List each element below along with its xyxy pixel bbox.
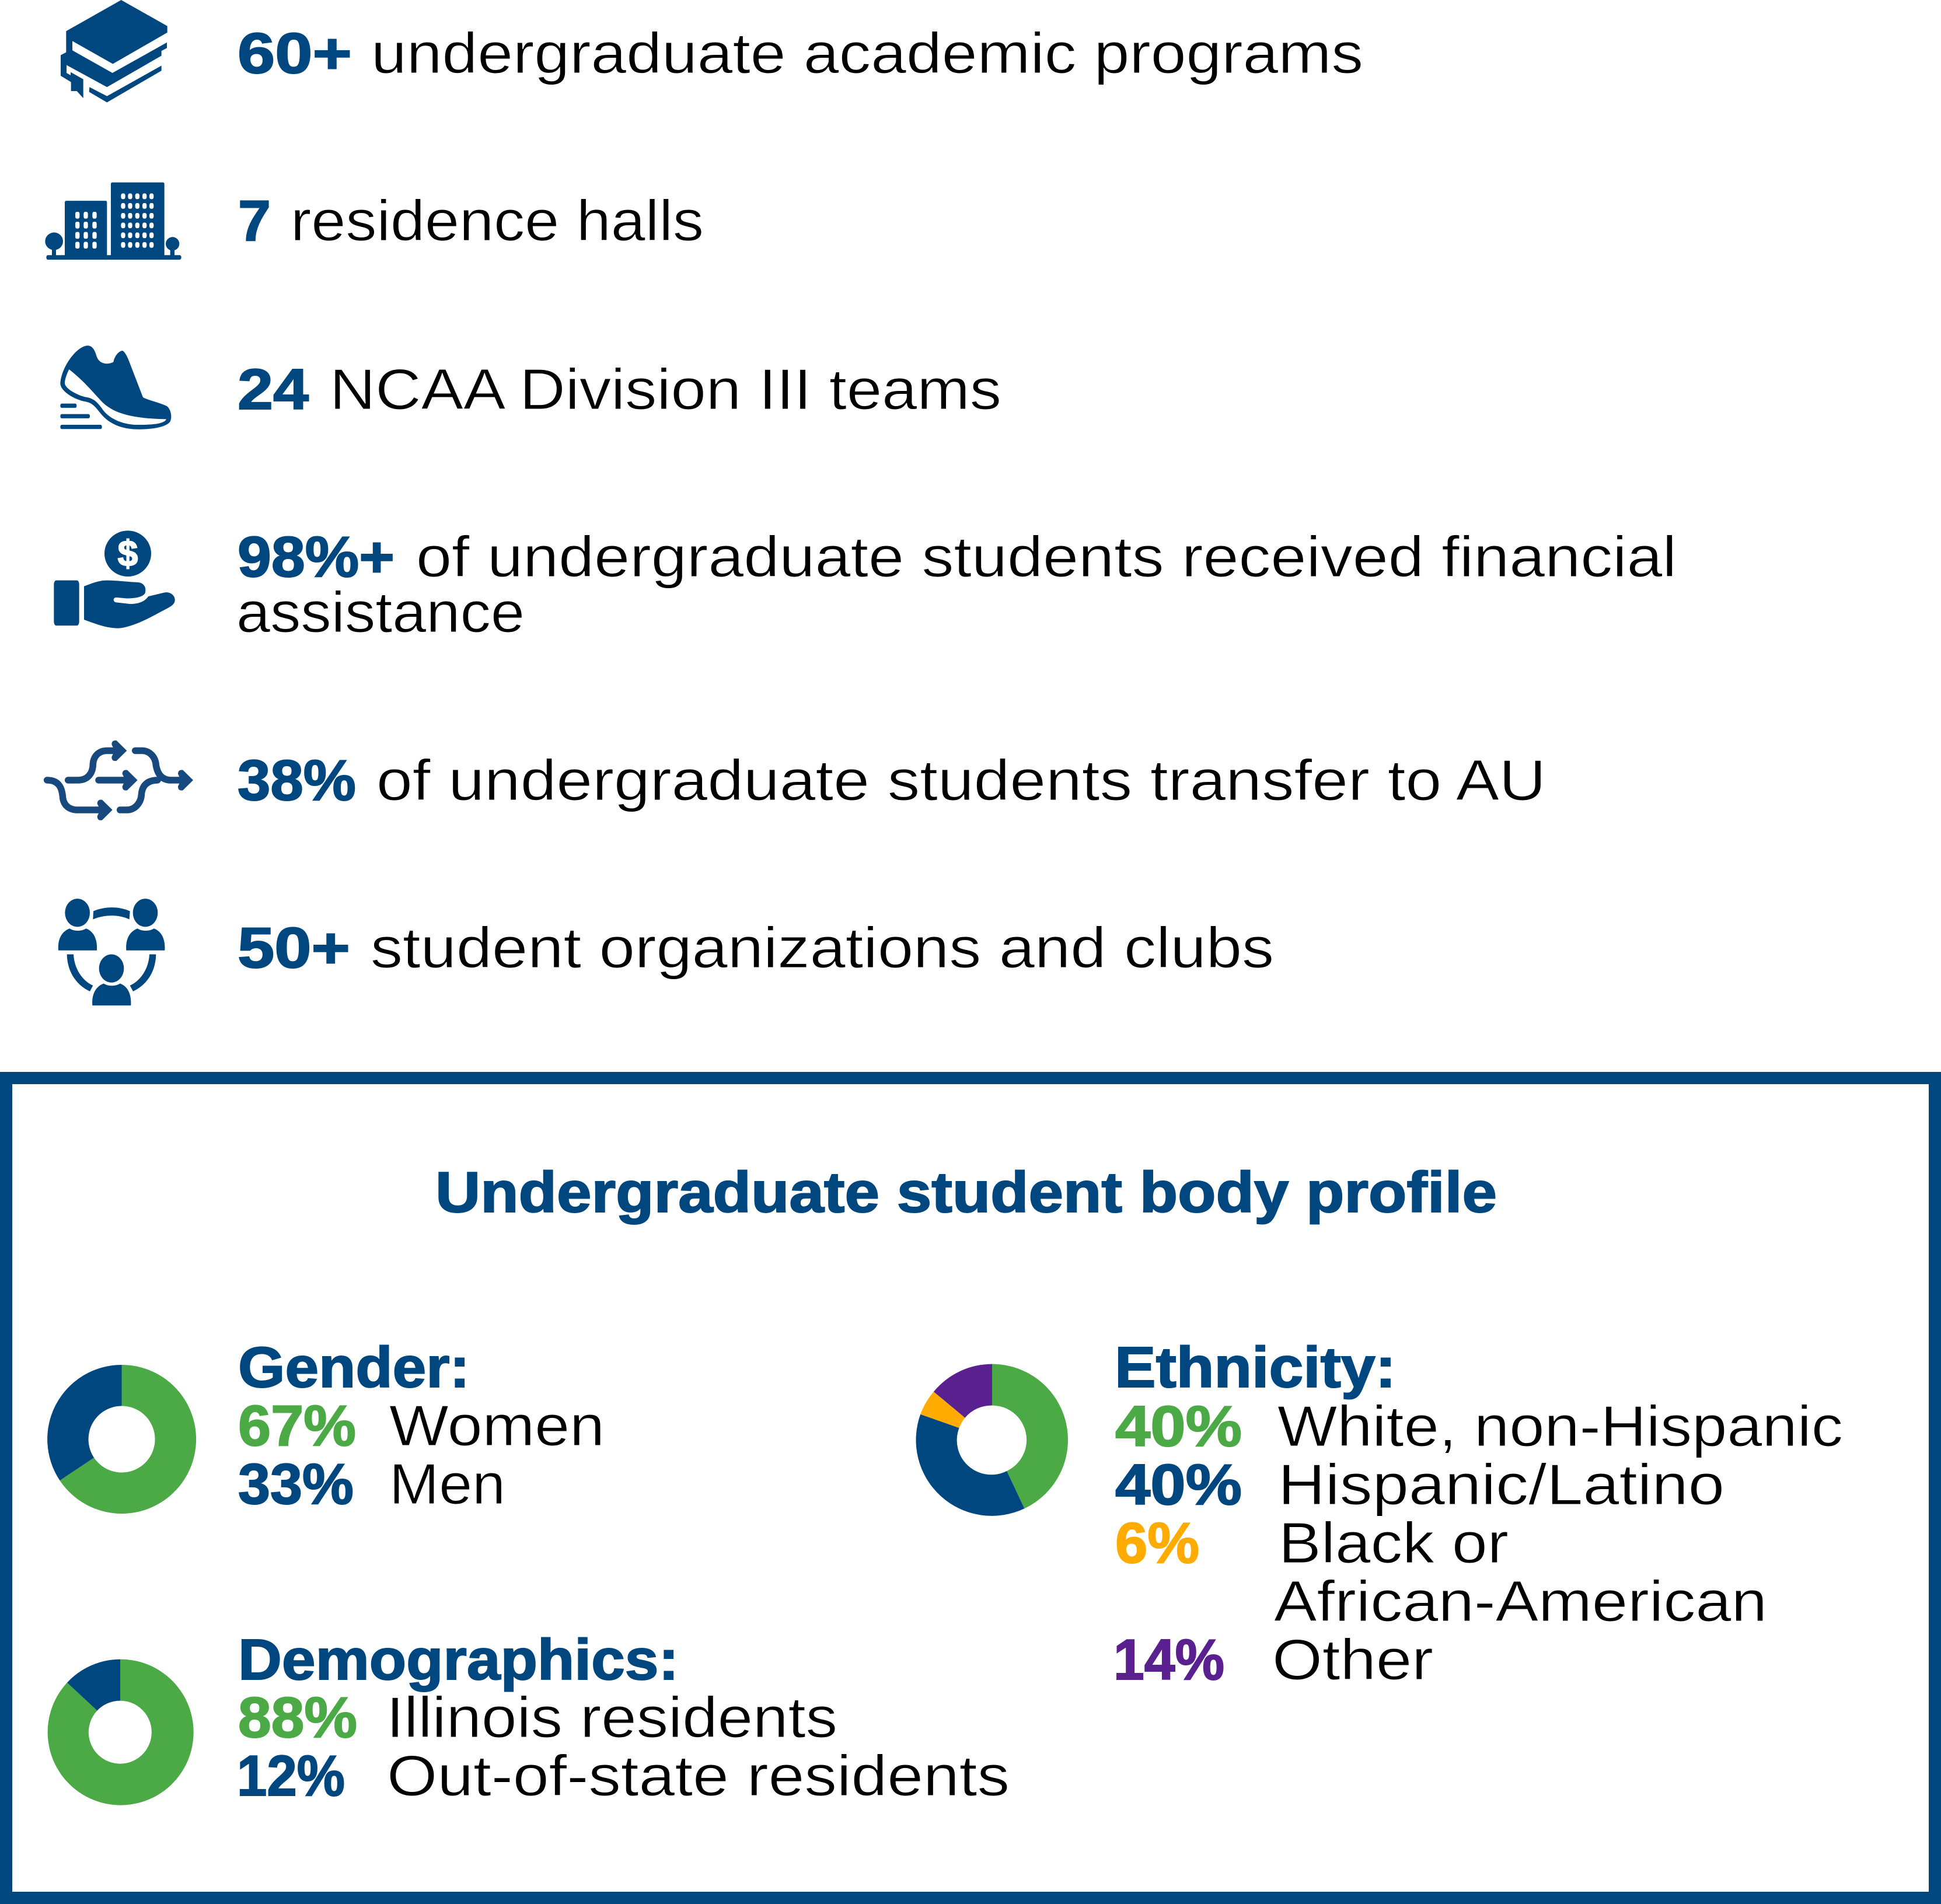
icon: books <box>61 0 167 102</box>
text: ethnicity breakdown: Hispanic/Latino <box>1278 1452 1724 1517</box>
text: ethnicity breakdown: 6% <box>1115 1511 1199 1575</box>
icon: hand holding coin: $ <box>118 534 138 574</box>
icon: transfer arrows <box>47 740 193 820</box>
text: ethnicity breakdown: 14% <box>1113 1627 1224 1692</box>
text: demographics breakdown: 12% <box>237 1744 345 1808</box>
stat: 7 residence halls: 7 <box>238 188 271 253</box>
text: demographics breakdown: Demographics: <box>238 1627 679 1692</box>
text: ethnicity breakdown: 40% <box>1115 1452 1242 1517</box>
stat: 7 residence halls: residence halls <box>291 188 704 253</box>
stat: 24 NCAA Division III teams: NCAA Division III teams <box>330 357 1001 421</box>
stat: 50+ student organizations and clubs: student organizations and clubs <box>371 916 1274 980</box>
stat: 98%+ financial assistance <box>236 525 1677 644</box>
text: ethnicity breakdown: Black or <box>1279 1511 1509 1575</box>
icon: running shoe <box>60 345 171 429</box>
text: gender breakdown: Women <box>389 1393 605 1458</box>
stat: 60+ undergraduate academic programs: 60+ <box>238 21 352 85</box>
text: ethnicity breakdown: White, non-Hispanic <box>1277 1394 1843 1458</box>
stat: 50+ student organizations and clubs: 50+ <box>238 916 350 980</box>
text: ethnicity breakdown: Other <box>1272 1627 1433 1692</box>
text: gender breakdown: 33% <box>238 1452 354 1516</box>
panel heading: Undergraduate student body profile <box>435 1160 1497 1224</box>
stat: 98%+ financial assistance: of undergraduate students received financial <box>416 525 1677 589</box>
text: gender breakdown: Gender: <box>238 1335 470 1399</box>
text: ethnicity breakdown: 40% <box>1115 1394 1242 1458</box>
text: gender breakdown: 67% <box>238 1393 356 1458</box>
stat: 38% transfer to AU: 38% <box>238 748 356 812</box>
stat: 98%+ financial assistance: 98%+ <box>238 525 395 589</box>
text: ethnicity breakdown: Ethnicity: <box>1115 1335 1396 1399</box>
text: ethnicity breakdown: African-American <box>1274 1569 1767 1633</box>
text: gender breakdown <box>238 1335 605 1516</box>
text: demographics breakdown: Out-of-state residents <box>387 1744 1010 1808</box>
donut chart: demographics <box>48 1660 194 1805</box>
text: demographics breakdown: 88% <box>238 1685 357 1749</box>
icon: connected people <box>58 899 165 1005</box>
donut chart: ethnicity <box>916 1364 1068 1516</box>
text: demographics breakdown <box>237 1627 1010 1808</box>
stat: 24 NCAA Division III teams: 24 <box>238 357 309 421</box>
text: ethnicity breakdown <box>1113 1335 1843 1692</box>
donut chart: gender <box>47 1365 196 1514</box>
icon: residence buildings <box>45 183 181 260</box>
text: gender breakdown: Men <box>389 1452 505 1516</box>
stat: 60+ undergraduate academic programs: undergraduate academic programs <box>371 21 1363 85</box>
text: demographics breakdown: Illinois residents <box>386 1685 837 1749</box>
panel border <box>0 1072 1941 1904</box>
stat: 38% transfer to AU: of undergraduate students transfer to AU <box>376 748 1546 812</box>
icon: hand holding coin <box>54 530 175 628</box>
stat: 98%+ financial assistance: assistance <box>236 580 525 644</box>
panel: undergraduate student body profile <box>0 1072 1941 1904</box>
